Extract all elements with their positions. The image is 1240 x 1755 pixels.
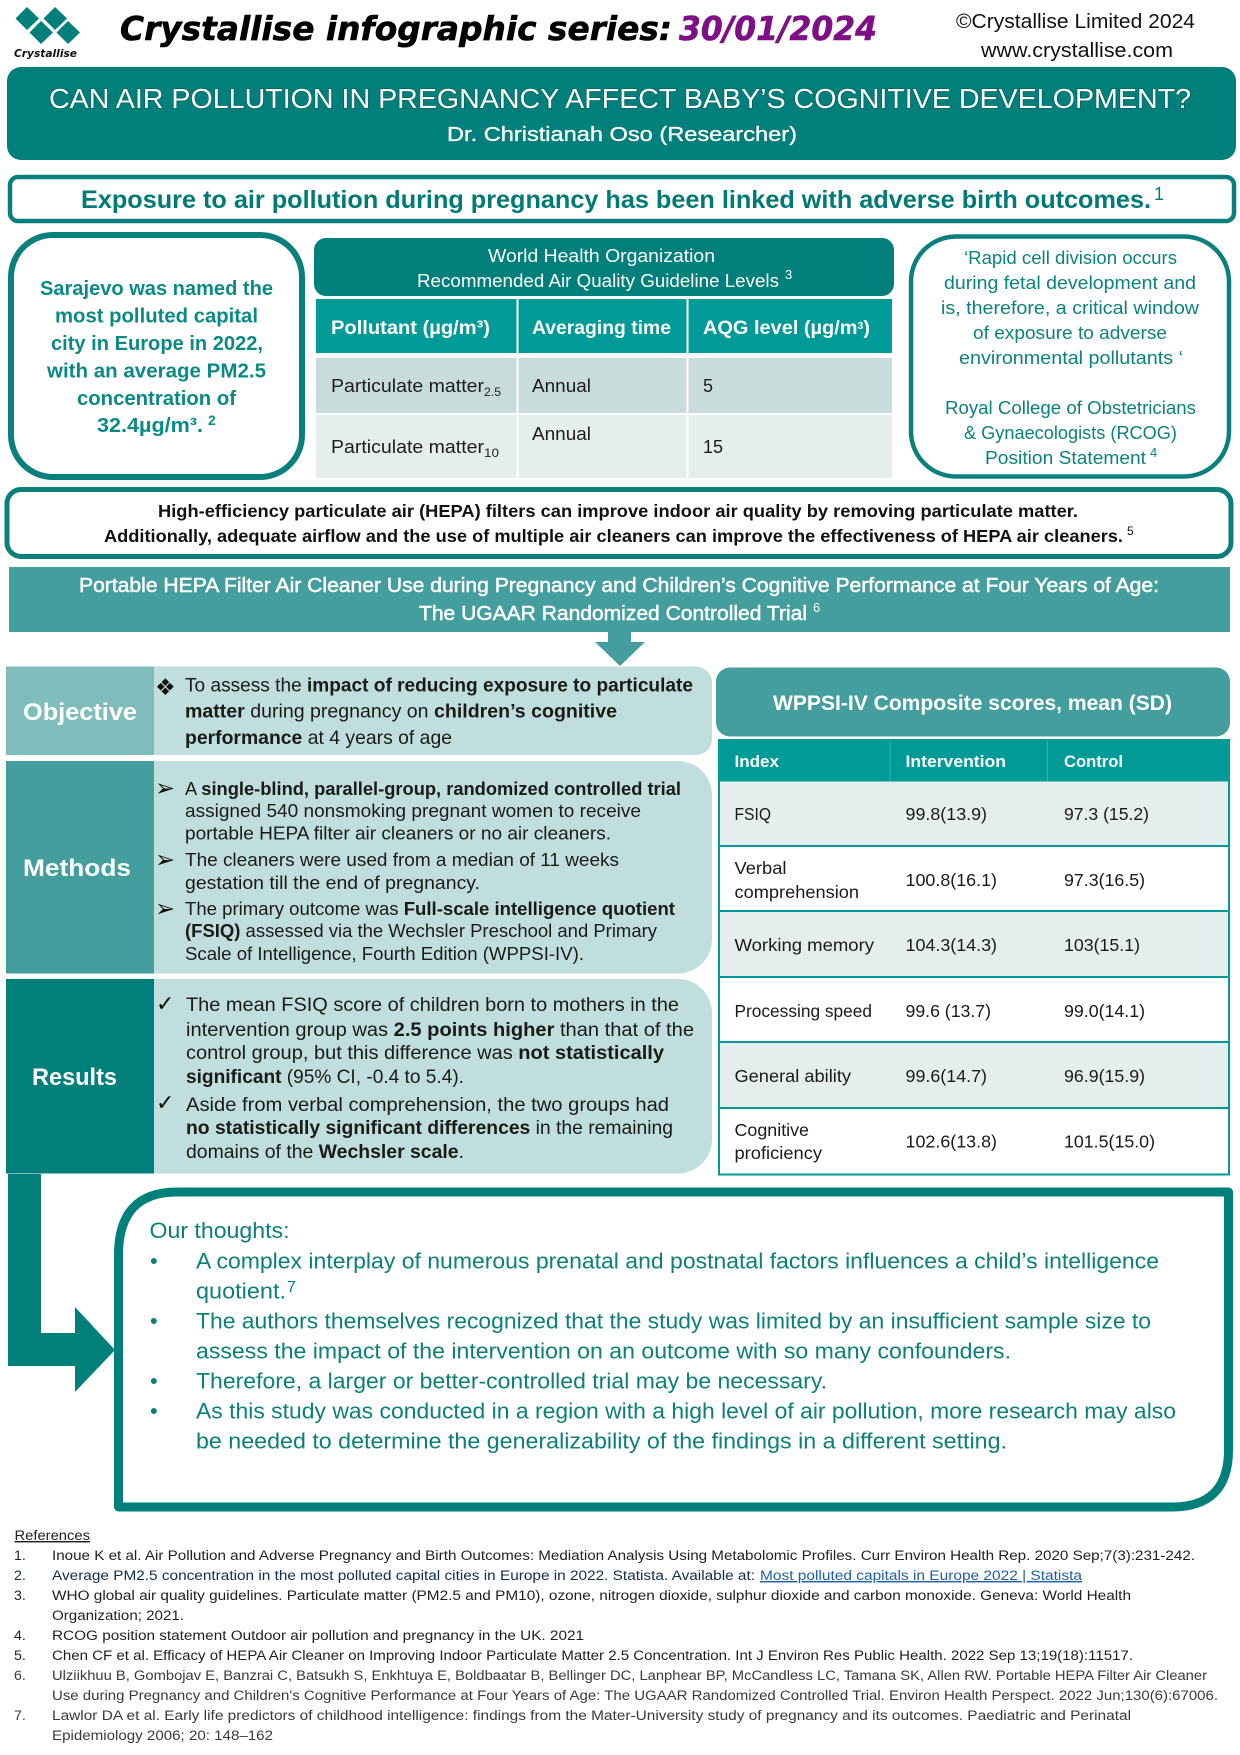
table: WHO air quality guideline levels: Annual [532, 424, 591, 444]
panel: methods: The cleaners were used from a median of 11 weeks [185, 849, 619, 870]
panel: methods: assigned 540 nonsmoking pregnant women to receive [185, 800, 641, 821]
panel: objective: matter during pregnancy on children’s cognitive [185, 700, 617, 722]
panel: our thoughts: • [150, 1398, 158, 1424]
callout: HEPA filters [7, 490, 1231, 556]
references: Ulziikhuu B, Gombojav E, Banzrai C, Batsukh S, Enkhtuya E, Boldbaatar B, Bellinger DC, Lanphear BP, McCandless LC, Tamana SK, Allen RW. Portable HEPA Filter Air Cleaner [52, 1668, 1207, 1684]
references: WHO global air quality guidelines. Particulate matter (PM2.5 and PM10), ozone, nitrogen dioxide, sulphur dioxide and carbon monoxide. Geneva: World Health [52, 1588, 1131, 1604]
panel: Sarajevo fact: 32.4µg/m³. [97, 414, 203, 437]
panel: methods: portable HEPA filter air cleaners or no air cleaners. [185, 822, 611, 844]
table: WHO air quality guideline levels: Particulate matter [331, 437, 484, 457]
table: WPPSI-IV composite scores: 96.9(15.9) [1064, 1066, 1145, 1086]
references: Organization; 2021. [52, 1608, 184, 1624]
table: WPPSI-IV composite scores: 99.0(14.1) [1064, 1001, 1145, 1021]
references: 7. [14, 1708, 26, 1724]
table: WPPSI-IV composite scores: 103(15.1) [1064, 935, 1140, 955]
table: WPPSI-IV composite scores: General ability [734, 1066, 851, 1086]
table: WPPSI-IV composite scores: Working memory [734, 935, 874, 955]
panel: results: domains of the Wechsler scale. [186, 1142, 464, 1163]
panel: trial title banner: Portable HEPA Filter Air Cleaner Use during Pregnancy and Children’s Cognitive Performance at Four Years of Age: [79, 575, 1159, 597]
table: WPPSI-IV composite scores [718, 739, 1230, 1174]
panel: Sarajevo fact [11, 235, 302, 477]
callout: exposure statement: 1 [1154, 184, 1164, 204]
copyright and website [956, 11, 1195, 62]
panel: methods: Scale of Intelligence, Fourth Edition (WPPSI-IV). [185, 943, 584, 964]
panel: results: ✓ [156, 1091, 174, 1116]
panel: RCOG quote: 4 [1150, 445, 1157, 460]
panel: RCOG quote: during fetal development and [944, 272, 1196, 293]
panel: objective: To assess the impact of reducing exposure to particulate [185, 674, 693, 696]
table: WPPSI-IV composite scores: Processing speed [734, 1001, 872, 1021]
table: WHO air quality guideline levels: 5 [703, 376, 713, 396]
references: 6. [14, 1668, 26, 1684]
callout: HEPA filters: Additionally, adequate airflow and the use of multiple air cleaners can improve the effectiveness of HEPA air cleaners. [104, 526, 1123, 546]
panel: main heading banner: Dr. Christianah Oso (Researcher) [447, 124, 797, 146]
panel: WHO guideline heading [314, 238, 894, 296]
table: WPPSI-IV composite scores: 97.3 (15.2) [1064, 804, 1149, 824]
table: WPPSI-IV composite scores: 97.3(16.5) [1064, 870, 1145, 890]
panel: trial title banner [9, 567, 1230, 632]
table: WPPSI-IV composite scores: comprehension [734, 882, 859, 902]
table: WHO air quality guideline levels: Pollutant (µg/m³) [331, 318, 490, 339]
panel: our thoughts: Therefore, a larger or better-controlled trial may be necessary. [196, 1368, 827, 1394]
table: WHO air quality guideline levels: 3 [858, 321, 864, 332]
table: WPPSI-IV composite scores: Index [734, 752, 780, 771]
table: WPPSI-IV composite scores: Verbal [734, 858, 786, 878]
panel: methods: Methods [23, 855, 131, 882]
table: WHO air quality guideline levels: Particulate matter [331, 376, 484, 396]
panel: results: Aside from verbal comprehension, the two groups had [186, 1095, 669, 1116]
panel: methods: ➢ [155, 894, 175, 922]
panel: our thoughts: As this study was conducted in a region with a high level of air pollution, more research may also [196, 1398, 1176, 1424]
references: Use during Pregnancy and Children's Cognitive Performance at Four Years of Age: The UGAAR Randomized Controlled Trial. Environ Health Perspect. 2022 Jun;130(6):67006. [52, 1688, 1218, 1704]
references: Average PM2.5 concentration in the most polluted capital cities in Europe in 2022. Statista. Available at: [52, 1568, 755, 1584]
references: 1. [14, 1548, 26, 1564]
callout: HEPA filters: High-efficiency particulate air (HEPA) filters can improve indoor air quality by removing particulate matter. [158, 501, 1078, 521]
panel: WPPSI-IV heading [716, 668, 1230, 736]
panel: methods: ➢ [155, 846, 175, 874]
panel: Sarajevo fact: 2 [208, 412, 216, 428]
table: WHO air quality guideline levels: Averaging time [532, 318, 671, 339]
references: 5. [14, 1648, 26, 1664]
panel: our thoughts: A complex interplay of numerous prenatal and postnatal factors influences a child’s intelligence [196, 1248, 1159, 1274]
panel: trial title banner: 6 [813, 600, 820, 615]
panel: RCOG quote: Royal College of Obstetricians [945, 397, 1196, 418]
panel: our thoughts: • [150, 1308, 158, 1334]
panel: RCOG quote: is, therefore, a critical window [941, 297, 1200, 318]
references: 4. [14, 1628, 26, 1644]
table: WHO air quality guideline levels: 15 [703, 437, 723, 457]
panel: objective: ❖ [155, 675, 176, 701]
panel: our thoughts: quotient. [196, 1278, 286, 1304]
table: WHO air quality guideline levels: Annual [532, 376, 591, 396]
panel: results [6, 979, 712, 1174]
arrow: results to our thoughts [8, 1174, 115, 1392]
callout: exposure statement [10, 177, 1234, 221]
table: WPPSI-IV composite scores: 99.6 (13.7) [906, 1001, 991, 1021]
panel: RCOG quote [911, 236, 1229, 476]
panel: Sarajevo fact: with an average PM2.5 [46, 360, 266, 382]
table: WHO air quality guideline levels: 2.5 [484, 385, 501, 399]
panel: results: Results [32, 1064, 117, 1091]
references: RCOG position statement Outdoor air pollution and pregnancy in the UK. 2021 [52, 1628, 584, 1644]
logo: Crystallise [14, 7, 80, 60]
panel: our thoughts: Our thoughts: [150, 1218, 290, 1243]
panel: main heading banner [7, 67, 1236, 160]
logo: Crystallise: Crystallise [14, 47, 78, 60]
panel: RCOG quote: environmental pollutants ‘ [959, 347, 1183, 368]
title: Crystallise infographic series: Crystallise infographic series: [120, 9, 672, 48]
panel: methods: The primary outcome was Full-scale intelligence quotient [185, 898, 676, 919]
table: WHO air quality guideline levels [316, 299, 892, 478]
table: WPPSI-IV composite scores: Intervention [906, 752, 1006, 771]
panel: RCOG quote: Position Statement [985, 447, 1146, 468]
references [14, 1528, 1218, 1744]
panel: Sarajevo fact: city in Europe in 2022, [51, 332, 263, 355]
panel: our thoughts: The authors themselves recognized that the study was limited by an insufficient sample size to [196, 1308, 1151, 1334]
table: WPPSI-IV composite scores: proficiency [734, 1143, 822, 1163]
panel: RCOG quote: of exposure to adverse [973, 322, 1167, 343]
panel: methods: A single-blind, parallel-group, randomized controlled trial [185, 778, 681, 799]
table: WPPSI-IV composite scores: 101.5(15.0) [1064, 1132, 1155, 1152]
copyright and website: ©Crystallise Limited 2024 [956, 11, 1195, 33]
panel: results: ✓ [156, 992, 174, 1017]
table: WPPSI-IV composite scores: 99.6(14.7) [906, 1066, 987, 1086]
panel: trial title banner: The UGAAR Randomized Controlled Trial [419, 603, 807, 625]
callout: HEPA filters: 5 [1127, 524, 1134, 538]
references: Lawlor DA et al. Early life predictors of childhood intelligence: findings from the Mater-University study of pregnancy and its outcomes. Paediatric and Perinatal [52, 1708, 1131, 1724]
table: WHO air quality guideline levels: 10 [484, 446, 499, 460]
panel: main heading banner: CAN AIR POLLUTION IN PREGNANCY AFFECT BABY’S COGNITIVE DEVELOPMENT? [49, 83, 1191, 114]
references: Most polluted capitals in Europe 2022 | Statista [760, 1568, 1082, 1584]
panel: Sarajevo fact: most polluted capital [55, 304, 258, 328]
panel: objective [6, 666, 712, 755]
panel: results: significant (95% CI, -0.4 to 5.4). [186, 1067, 464, 1088]
callout: exposure statement: Exposure to air pollution during pregnancy has been linked with adverse birth outcomes. [81, 186, 1151, 214]
panel: our thoughts: 7 [287, 1279, 296, 1296]
table: WPPSI-IV composite scores: Cognitive [734, 1120, 809, 1140]
panel: objective: Objective [23, 699, 137, 726]
panel: methods [6, 761, 712, 974]
panel: WPPSI-IV heading: WPPSI-IV Composite scores, mean (SD) [773, 692, 1172, 715]
panel: Sarajevo fact: concentration of [77, 387, 236, 410]
table: WPPSI-IV composite scores: FSIQ [734, 804, 771, 824]
panel: our thoughts: assess the impact of the intervention on an outcome with so many confounders. [196, 1338, 1011, 1364]
copyright and website: www.crystallise.com [980, 40, 1173, 62]
panel: WHO guideline heading: 3 [785, 267, 792, 282]
panel: WHO guideline heading: World Health Organization [488, 246, 715, 266]
table: WPPSI-IV composite scores: 102.6(13.8) [906, 1132, 997, 1152]
panel: our thoughts: be needed to determine the generalizability of the findings in a different setting. [196, 1428, 1007, 1454]
panel: results: The mean FSIQ score of children born to mothers in the [186, 995, 679, 1016]
references: 2. [14, 1568, 26, 1584]
table: WPPSI-IV composite scores: 99.8(13.9) [906, 804, 987, 824]
panel: results: no statistically significant differences in the remaining [186, 1118, 673, 1139]
table: WHO air quality guideline levels: ) [863, 318, 870, 339]
table: WPPSI-IV composite scores: 100.8(16.1) [906, 870, 997, 890]
table: WPPSI-IV composite scores: Control [1064, 752, 1123, 771]
title: Crystallise infographic series: 30/01/2024 [679, 9, 877, 48]
references: Chen CF et al. Efficacy of HEPA Air Cleaner on Improving Indoor Particulate Matter 2.5 Concentration. Int J Environ Res Public Health. 2022 Sep 13;19(18):11517. [52, 1648, 1133, 1664]
panel: methods: (FSIQ) assessed via the Wechsler Preschool and Primary [185, 920, 658, 941]
panel: RCOG quote: & Gynaecologists (RCOG) [964, 422, 1177, 443]
panel: results: control group, but this difference was not statistically [186, 1043, 664, 1064]
panel: results: intervention group was 2.5 points higher than that of the [186, 1020, 694, 1041]
panel: methods: ➢ [155, 774, 175, 802]
panel: methods: gestation till the end of pregnancy. [185, 872, 480, 893]
references: Inoue K et al. Air Pollution and Adverse Pregnancy and Birth Outcomes: Mediation Analysis Using Metabolomic Profiles. Curr Environ Health Rep. 2020 Sep;7(3):231-242. [52, 1548, 1195, 1564]
references: References [14, 1528, 90, 1544]
panel: objective: performance at 4 years of age [185, 727, 452, 749]
table: WPPSI-IV composite scores: 104.3(14.3) [906, 935, 997, 955]
panel: our thoughts: • [150, 1248, 158, 1274]
arrow: down to study summary [595, 632, 645, 666]
references: 3. [14, 1588, 26, 1604]
panel: our thoughts: • [150, 1368, 158, 1394]
references: Epidemiology 2006; 20: 148–162 [52, 1728, 273, 1744]
panel: WHO guideline heading: Recommended Air Quality Guideline Levels [417, 271, 779, 291]
panel: RCOG quote: ‘Rapid cell division occurs [964, 247, 1177, 268]
panel: our thoughts [118, 1192, 1228, 1507]
panel: Sarajevo fact: Sarajevo was named the [40, 277, 273, 300]
table: WHO air quality guideline levels: AQG level (µg/m [703, 318, 850, 339]
